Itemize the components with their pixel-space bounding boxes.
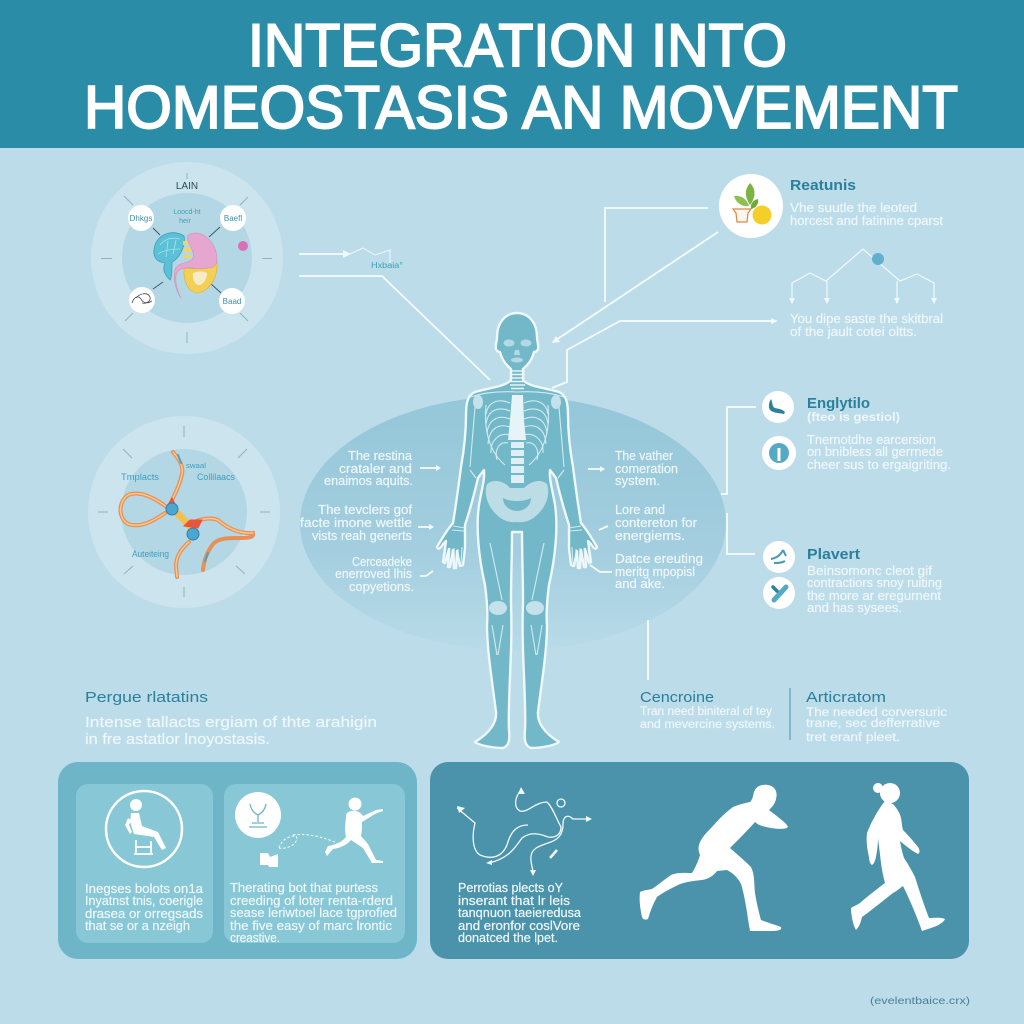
panel: Englytilo: cheer sus to ergaigriting. bbox=[807, 458, 951, 472]
icon: stomach and liver bbox=[174, 233, 217, 298]
icon: label bubbles: Baefl bbox=[224, 214, 242, 223]
icon: running man silhouette bbox=[640, 785, 788, 931]
chart labels: Collilaacs bbox=[197, 472, 235, 482]
panel: Plavert bbox=[727, 513, 942, 615]
icon: squiggle arrows bbox=[457, 787, 592, 876]
card: runner bbox=[224, 784, 405, 945]
text block: ellipse right column: system. bbox=[615, 474, 660, 488]
panel: bottom right: inserant that lr leis bbox=[458, 894, 570, 908]
panel: Plavert: Plavert bbox=[807, 547, 860, 563]
connector lines: left to body: Hxbaia° bbox=[371, 261, 403, 270]
card: seated figure bbox=[76, 784, 213, 943]
text block: ellipse left column bbox=[300, 449, 414, 594]
text block: ellipse right column: meritg mpopisl bbox=[615, 565, 695, 579]
panel: bottom right: donatced the lpet. bbox=[458, 931, 558, 945]
text block: Pergue rlatatins: Pergue rlatatins bbox=[85, 689, 208, 706]
panel: bottom right: Perrotias plects oY bbox=[458, 881, 564, 895]
skeleton bbox=[444, 340, 590, 655]
text block: ellipse right column: comeration bbox=[615, 462, 678, 476]
panel: bottom left bbox=[58, 762, 417, 959]
panel: Englytilo: Tnernotdhe earcersion bbox=[807, 433, 936, 447]
title: INTEGRATION INTO bbox=[248, 12, 787, 79]
connector lines: left to body bbox=[299, 248, 490, 380]
text block: ellipse right column bbox=[615, 449, 703, 591]
text block: ellipse left column: facte imone wettle bbox=[300, 516, 412, 530]
icon: label bubbles bbox=[128, 205, 246, 314]
panel: Plavert: Beinsomonc cleot gif bbox=[807, 564, 933, 578]
panel: Reatunis: horcest and fatinine cparst bbox=[790, 214, 944, 228]
text block: ellipse right column: Lore and bbox=[615, 503, 665, 517]
icon: brain bbox=[154, 233, 184, 280]
icon: nerve tubes bbox=[120, 452, 253, 577]
panel: Englytilo bbox=[721, 391, 951, 494]
panel: Englytilo: (fteo is gestiol) bbox=[807, 410, 900, 424]
chart labels: swaal bbox=[186, 463, 206, 470]
arrows: ellipse left column bbox=[418, 465, 441, 576]
panel: Plavert: and has sysees. bbox=[807, 601, 902, 615]
panel: Englytilo: Englytilo bbox=[807, 396, 870, 412]
arrows: ellipse right column bbox=[588, 466, 612, 572]
panel: brain and organs circle: LAIN bbox=[176, 181, 198, 192]
card: seated figure: drasea or orregsads bbox=[85, 907, 203, 921]
icon: bubble two bbox=[762, 436, 796, 470]
text block: ellipse right column: Datce ereuting bbox=[615, 552, 703, 566]
card: runner: creastive. bbox=[230, 931, 280, 945]
chart labels: Tmplacts bbox=[121, 472, 160, 482]
text block: tree caption bbox=[790, 312, 943, 339]
icon: plant and lemon bbox=[719, 174, 783, 238]
title: HOMEOSTASIS AN MOVEMENT bbox=[84, 74, 958, 141]
card: runner: the five easy of marc lrontic bbox=[230, 919, 392, 933]
icon: seated person bbox=[106, 791, 182, 867]
text block: Cencroine: and mevercine systems. bbox=[640, 719, 775, 731]
text block: ellipse left column: enaimos aquits. bbox=[324, 474, 413, 488]
text block: ellipse right column: contereton for bbox=[615, 516, 697, 530]
icon: round badge bbox=[235, 792, 281, 838]
card: seated figure: that se or a nzeigh bbox=[85, 919, 190, 933]
text block: ellipse left column: crataler and bbox=[339, 462, 412, 476]
text block: Pergue rlatatins bbox=[85, 689, 377, 748]
face bbox=[504, 340, 532, 362]
icon: small device bbox=[260, 853, 278, 867]
text block: ellipse left column: copyetions. bbox=[349, 580, 414, 594]
icon: bubble one bbox=[762, 391, 794, 423]
text block: Cencroine bbox=[640, 620, 775, 731]
panel: Reatunis bbox=[719, 174, 944, 238]
icon: label bubbles: Baad bbox=[223, 297, 241, 306]
dashed trajectory bbox=[279, 834, 337, 848]
text block: tree caption: of the jault cotei oltts. bbox=[790, 325, 917, 339]
text block: Articratom: Articratom bbox=[806, 690, 886, 706]
panel: brain and organs circle: heir bbox=[179, 218, 191, 225]
text block: Pergue rlatatins: in fre astatlor lnoyostasis. bbox=[85, 731, 270, 748]
card: seated figure: Inegses bolots on1a bbox=[85, 882, 203, 896]
shoulder and knee joints bbox=[473, 395, 561, 615]
panel: bottom right: and eronfor coslVore bbox=[458, 919, 580, 933]
card: seated figure: Inyatnst tnis, coerigle bbox=[85, 894, 203, 908]
panel: Reatunis: Reatunis bbox=[790, 177, 856, 194]
text block: ellipse left column: enerroved lhis bbox=[335, 567, 412, 581]
panel: Plavert: contractiors snoy ruiting bbox=[807, 576, 942, 590]
panel: nerve cell circle bbox=[88, 416, 280, 608]
text block: Articratom: tret eranf pleet. bbox=[806, 732, 900, 744]
text block: Articratom: The needed corversuric bbox=[806, 707, 947, 719]
text block: ellipse left column: The tevclers gof bbox=[318, 503, 413, 517]
text block: tree caption: You dipe saste the skitbral bbox=[790, 312, 943, 326]
card: runner: Therating bot that purtess bbox=[230, 881, 378, 895]
text block: ellipse right column: The vather bbox=[615, 449, 673, 463]
panel: central ellipse bbox=[300, 396, 726, 650]
panel: brain and organs circle: Loocd-ht bbox=[173, 209, 201, 216]
text block: ellipse right column: and ake. bbox=[615, 577, 665, 591]
chart labels bbox=[121, 463, 235, 559]
panel: Plavert: the more ar eregurnent bbox=[807, 589, 942, 603]
icon: bubble three bbox=[763, 541, 795, 573]
text block: Articratom bbox=[790, 688, 947, 744]
figure: human body with skeleton bbox=[437, 313, 597, 748]
icon: label bubbles: Dhkgs bbox=[130, 214, 152, 223]
text block: Cencroine: Tran need biniteral of tey bbox=[640, 706, 772, 718]
ribs left bbox=[444, 392, 517, 655]
text block: Pergue rlatatins: Intense tallacts ergiam of thte arahigin bbox=[85, 714, 377, 731]
ribs right bbox=[517, 392, 590, 655]
title bbox=[84, 12, 958, 141]
chart labels: Auteiteing bbox=[132, 549, 169, 559]
text block: ellipse left column: vists reah generts bbox=[312, 529, 412, 543]
card: runner: sease leriwtoel lace tgprofied bbox=[230, 906, 397, 920]
connector lines: right to body bbox=[552, 208, 778, 388]
diagram: branching tree bbox=[789, 249, 937, 304]
neck and sternum bbox=[508, 371, 526, 483]
text block: Cencroine: Cencroine bbox=[640, 690, 714, 706]
panel: Reatunis: Vhe suutle the leoted bbox=[790, 201, 917, 215]
text block: ellipse right column: energiems. bbox=[615, 529, 685, 543]
panel: bottom right: tanqnuon taeieredusa bbox=[458, 906, 581, 920]
text block: Articratom: trane, sec defferrative bbox=[806, 718, 940, 730]
pelvis bbox=[486, 481, 548, 522]
panel: brain and organs circle bbox=[91, 162, 283, 354]
panel: bottom right bbox=[430, 762, 969, 959]
panel: Englytilo: on bnibleεs all gerrnede bbox=[807, 445, 943, 459]
icon: small pink spot bbox=[238, 241, 248, 251]
text block: ellipse left column: Cerceadeke bbox=[352, 555, 412, 569]
icon: walking woman silhouette bbox=[851, 783, 945, 931]
footer credit: (evelentbaice.crx) bbox=[870, 996, 970, 1007]
text block: ellipse left column: The restina bbox=[348, 449, 412, 463]
icon: bubble four bbox=[763, 577, 795, 609]
icon: runner bbox=[325, 798, 383, 863]
header banner bbox=[0, 0, 1024, 148]
card: runner: creeding of loter renta-rderd bbox=[230, 894, 393, 908]
